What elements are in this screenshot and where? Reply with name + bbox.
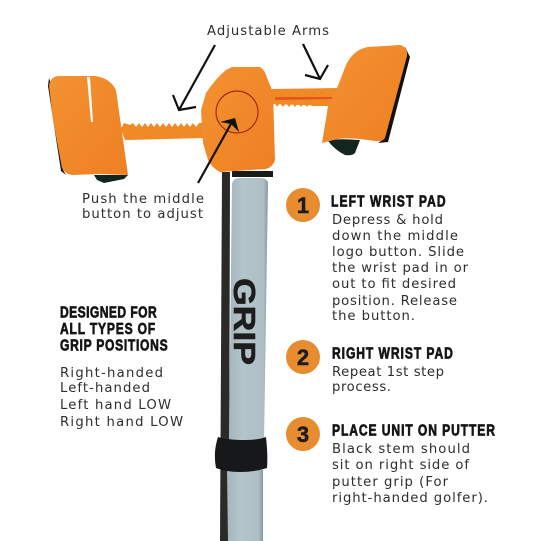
heading: left wrist pad: LEFT WRIST PAD (331, 192, 446, 210)
left wrist pad (49, 76, 128, 175)
grey shaft lower (227, 470, 263, 541)
body text step 1: the wrist pad in or (332, 261, 469, 276)
middle button ring (216, 91, 258, 133)
left pad highlight (87, 77, 93, 122)
body text step 1: out to fit desired (332, 277, 456, 292)
body text step 3 (332, 442, 488, 506)
black stem (220, 172, 230, 541)
left arm (120, 127, 205, 140)
left wrist pad dark foot (94, 175, 128, 183)
black clamp band (215, 437, 267, 472)
product: putter grip trainer (48, 45, 410, 541)
label: Adjustable Arms: Adjustable Arms (207, 24, 329, 39)
step 1 (286, 188, 469, 324)
left wrist pad backing (48, 78, 66, 175)
list of grip positions (60, 366, 183, 430)
right wrist pad (322, 45, 407, 143)
right arm (272, 88, 345, 140)
body text step 1: logo button. Slide (332, 245, 464, 260)
number badge 2: 2 (297, 345, 309, 370)
label: push the middle button: Push the middle (82, 192, 204, 207)
label: push the middle button (82, 192, 204, 222)
arrow: to middle button (198, 118, 239, 183)
body text step 3: sit on right side of (332, 458, 469, 473)
heading: designed for all types: GRIP POSITIONS (60, 336, 168, 354)
grey shaft upper (229, 178, 268, 440)
label: push the middle button: button to adjust (82, 207, 203, 222)
right wrist pad dark foot (328, 139, 360, 155)
body text step 1 (332, 213, 469, 324)
list of grip positions: Left hand LOW (60, 398, 171, 413)
body text step 1: the button. (332, 309, 415, 324)
body text step 2 (332, 365, 444, 395)
number badge 3 (286, 417, 320, 451)
number badge 3: 3 (297, 422, 309, 447)
heading: place unit on putter: PLACE UNIT ON PUTTER (332, 421, 495, 439)
number badge 1 (286, 188, 320, 222)
heading: designed for all types: ALL TYPES OF (60, 320, 155, 337)
heading: designed for all types: DESIGNED FOR (60, 303, 157, 321)
body text step 2: process. (332, 380, 391, 395)
step 2 (286, 340, 453, 395)
central hub (201, 67, 275, 172)
step 3 (286, 417, 495, 506)
body text step 1: position. Release (332, 294, 457, 309)
body text step 1: Depress & hold (332, 213, 443, 228)
shaft label GRIP: GRIP (227, 278, 262, 365)
list of grip positions: Left-handed (60, 381, 150, 396)
list of grip positions: Right hand LOW (60, 415, 183, 430)
body text step 2: Repeat 1st step (332, 365, 444, 380)
body text step 1: down the middle (332, 229, 458, 244)
left arm teeth (122, 123, 205, 128)
heading: right wrist pad: RIGHT WRIST PAD (332, 344, 453, 362)
arrow: to left arm (173, 45, 215, 110)
panel: grip positions (60, 303, 183, 430)
list of grip positions: Right-handed (60, 366, 163, 381)
right wrist pad backing (378, 47, 410, 143)
number badge 1: 1 (297, 193, 309, 218)
right arm red stripe (275, 97, 332, 100)
right arm teeth (275, 102, 328, 107)
heading: designed for all types (60, 303, 168, 354)
arrow: to right arm (303, 44, 328, 79)
black collar (232, 171, 273, 177)
body text step 3: putter grip (For (332, 475, 449, 490)
number badge 2 (286, 340, 320, 374)
body text step 3: right-handed golfer). (332, 491, 488, 506)
body text step 3: Black stem should (332, 442, 470, 457)
